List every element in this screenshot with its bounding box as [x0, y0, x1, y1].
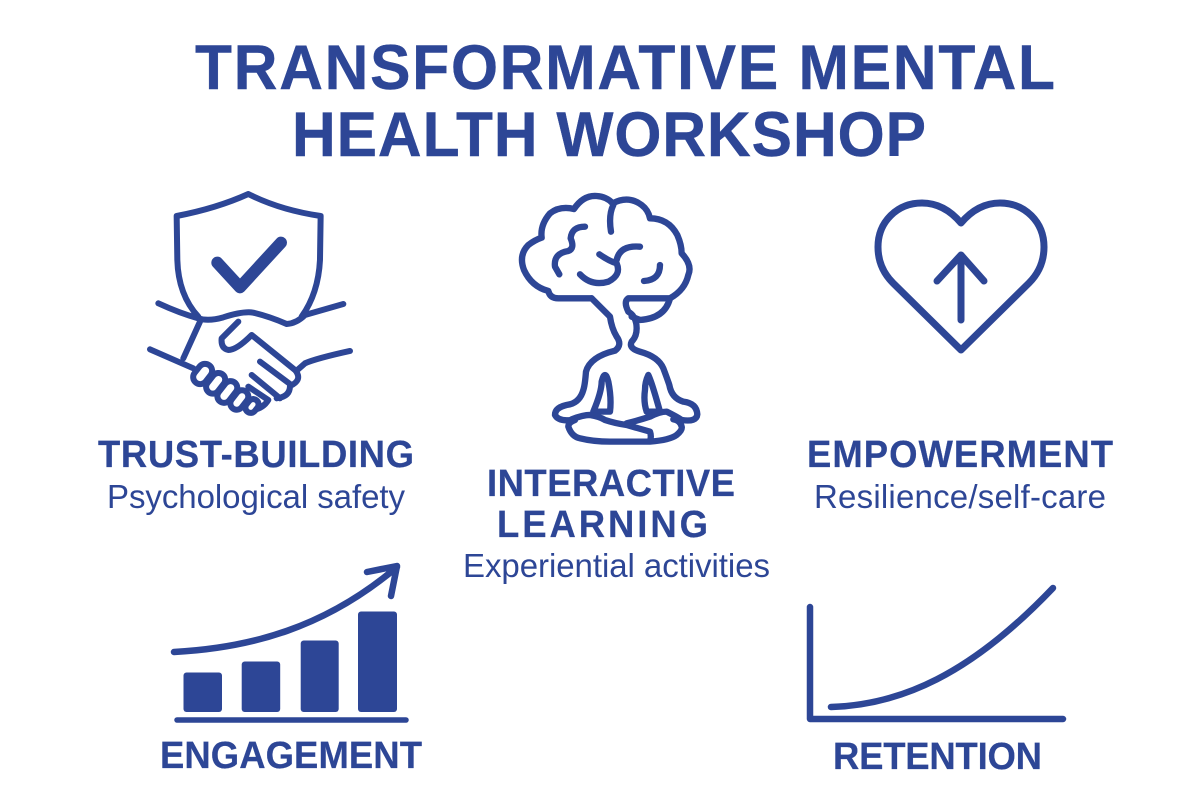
shield outline [177, 194, 321, 317]
heading: interactive learning [487, 461, 735, 545]
title: HEALTH WORKSHOP [292, 100, 926, 170]
arms [593, 375, 660, 412]
heading: interactive learning: INTERACTIVE [487, 461, 735, 504]
brain outline and body [522, 196, 697, 421]
text: resilience/self-care: Resilience/self-care [814, 478, 1106, 515]
check mark [217, 243, 281, 287]
chart: retention curve [810, 588, 1063, 719]
title: TRANSFORMATIVE MENTAL [195, 33, 1055, 103]
icon: brain tree and meditating figure [522, 196, 697, 442]
text: experiential activities: Experiential activities [463, 547, 770, 584]
heading: interactive learning: LEARNING [497, 502, 708, 545]
brain folds [555, 205, 660, 283]
heading: retention: RETENTION [833, 734, 1042, 777]
icon: heart with up arrow [878, 203, 1044, 350]
chart: engagement bars with rising arrow [174, 566, 406, 720]
handshake [150, 303, 350, 415]
heading: engagement: ENGAGEMENT [160, 733, 422, 776]
text: psychological safety: Psychological safety [107, 478, 406, 515]
icon: shield and handshake [150, 194, 350, 415]
heading: empowerment: EMPOWERMENT [807, 432, 1113, 475]
heading: trust-building: TRUST-BUILDING [98, 432, 414, 475]
title [195, 33, 1055, 170]
crossed legs [568, 412, 682, 442]
